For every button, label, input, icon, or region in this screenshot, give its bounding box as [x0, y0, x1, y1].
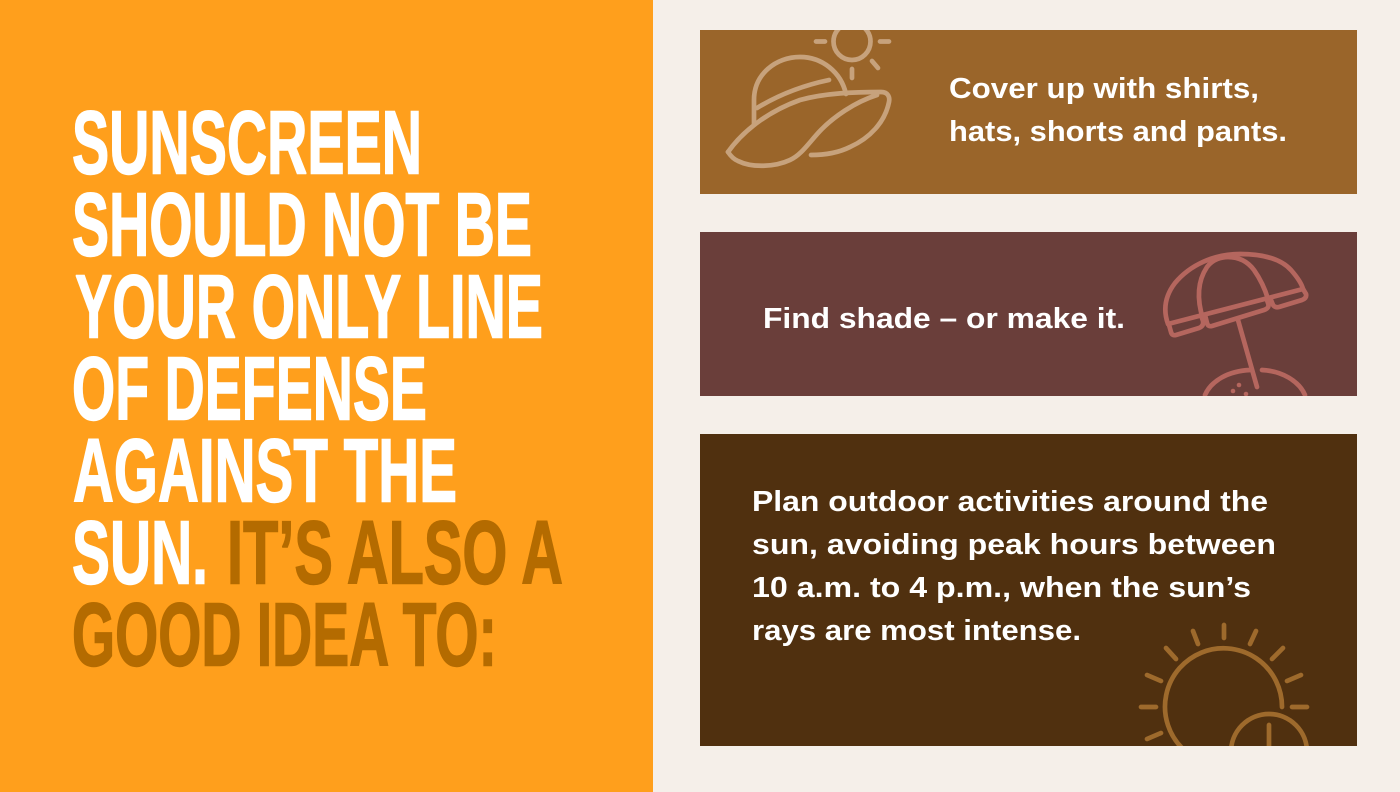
icon: sun hat — [728, 23, 889, 166]
text: plan activities — [752, 486, 1276, 647]
heading: IT’S ALSO A — [227, 503, 563, 603]
heading — [72, 93, 563, 685]
heading: SUN. — [72, 503, 208, 603]
text: cover up — [949, 73, 1287, 148]
heading: SHOULD NOT BE — [72, 175, 532, 275]
text: cover up: Cover up with shirts, — [949, 73, 1259, 105]
icon: sun and clock — [1138, 622, 1310, 746]
heading: GOOD IDEA TO: — [72, 585, 497, 685]
panel: cover up — [700, 23, 1357, 194]
panel: orange headline panel — [0, 0, 653, 792]
text: plan activities: Plan outdoor activities around the — [752, 486, 1268, 518]
text: cover up: hats, shorts and pants. — [949, 116, 1287, 148]
text: plan activities: sun, avoiding peak hours between — [752, 529, 1276, 561]
panel: find shade — [700, 232, 1357, 396]
text: plan activities: rays are most intense. — [752, 615, 1081, 647]
heading: SUNSCREEN — [72, 93, 422, 193]
heading: YOUR ONLY LINE — [75, 257, 543, 357]
heading: OF DEFENSE — [72, 339, 427, 439]
text: plan activities: 10 a.m. to 4 p.m., when the sun’s — [752, 572, 1251, 604]
icon: beach umbrella — [1165, 254, 1306, 396]
panel: plan activities — [700, 434, 1357, 746]
heading: AGAINST THE — [73, 421, 457, 521]
text: find shade: Find shade – or make it. — [763, 303, 1125, 335]
